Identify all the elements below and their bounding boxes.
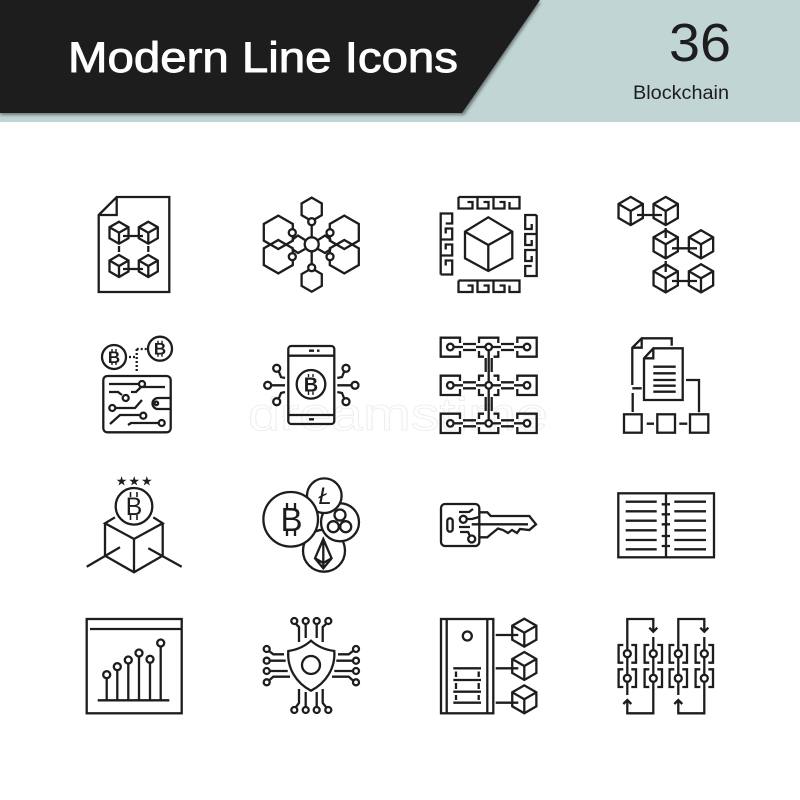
icon: security shield chip: [264, 618, 359, 713]
rating stars: ★★★: [116, 474, 154, 490]
litecoin letter: Ł: [318, 483, 332, 510]
header band: [0, 0, 800, 122]
bitcoin letter right: B: [154, 340, 166, 359]
icon: bitcoin circuit wallet: [102, 337, 172, 432]
bitcoin letter left: B: [108, 348, 120, 367]
icon: connected blocks: [619, 197, 713, 292]
icon: documents flow: [624, 338, 708, 433]
bitcoin letter: B: [280, 501, 303, 538]
subtitle: Blockchain: [633, 83, 729, 104]
bitcoin letter: B: [304, 374, 318, 396]
icon: cryptocurrency coins: [263, 478, 359, 572]
icon: cube with circuit frame: [441, 197, 537, 292]
icon: open ledger: [618, 493, 714, 557]
icon: chain loop arrows: [619, 619, 713, 713]
set number: 36: [669, 13, 731, 73]
icon: hexagon network: [264, 198, 359, 292]
bitcoin letter: B: [126, 493, 142, 521]
icon: server with blocks: [441, 619, 536, 713]
icon: bitcoin block with stars: [87, 474, 182, 572]
icon: chain grid: [441, 338, 537, 433]
watermark: dreamstime: [248, 388, 548, 440]
ether mark: [315, 539, 332, 568]
ripple mark: [328, 510, 351, 532]
icon: stem chart window: [87, 619, 182, 713]
icon: bitcoin smartphone: [264, 346, 358, 424]
title: Modern Line Icons: [68, 34, 458, 82]
icon: digital key: [441, 504, 536, 546]
icon: document with block network: [99, 197, 169, 292]
